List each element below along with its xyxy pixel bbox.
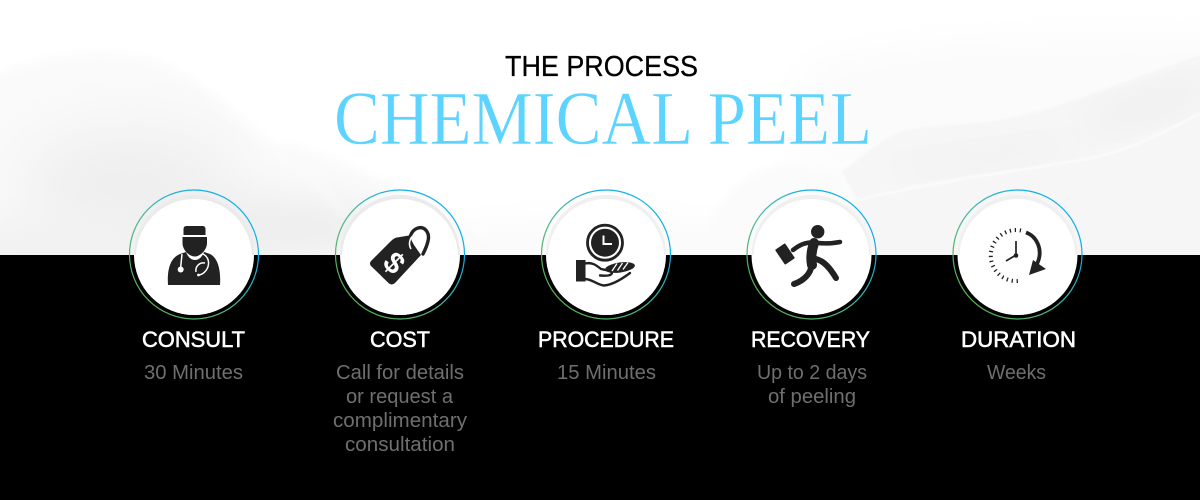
background: silk wave upper area: [0, 0, 1200, 276]
detail: cost text: complimentary: [333, 410, 467, 432]
step: recovery: [747, 190, 876, 408]
icon: clock over open hand: [576, 225, 636, 286]
circle badge: duration: [953, 190, 1082, 319]
circle badge: recovery: [747, 190, 876, 319]
icon: running businessman with briefcase: [775, 225, 840, 284]
step: consult: [130, 190, 258, 384]
detail: 30 minutes: 30 Minutes: [144, 362, 243, 384]
detail: cost text: [333, 362, 467, 456]
title: chemical peel: CHEMICAL PEEL: [334, 77, 872, 161]
step: procedure: [538, 190, 674, 384]
step: duration: [953, 190, 1082, 384]
label: recovery: RECOVERY: [751, 327, 870, 352]
icon: price tag: [370, 228, 428, 284]
label: cost: COST: [370, 327, 430, 352]
detail: recovery text: of peeling: [768, 386, 856, 408]
black lower background: [0, 255, 1200, 500]
circle badge: consult: [130, 190, 258, 319]
detail: cost text: consultation: [345, 434, 455, 456]
circle badge: procedure: [542, 190, 670, 319]
label: consult: CONSULT: [142, 327, 245, 352]
detail: 15 minutes: 15 Minutes: [557, 362, 656, 384]
label: duration: DURATION: [961, 327, 1076, 352]
icon: doctor with stethoscope: [168, 226, 220, 285]
step: cost: [333, 190, 467, 456]
heading: the process: THE PROCESS: [505, 51, 698, 83]
detail: cost text: Call for details: [336, 362, 464, 384]
detail: recovery text: [757, 362, 867, 408]
detail: recovery text: Up to 2 days: [757, 362, 867, 384]
icon: clock with arrow: [991, 230, 1046, 281]
circle badge: cost: [336, 190, 464, 319]
detail: weeks: Weeks: [987, 362, 1046, 384]
detail: cost text: or request a: [346, 386, 454, 408]
icon: price tag: $: [376, 246, 412, 281]
label: procedure: PROCEDURE: [538, 327, 674, 352]
